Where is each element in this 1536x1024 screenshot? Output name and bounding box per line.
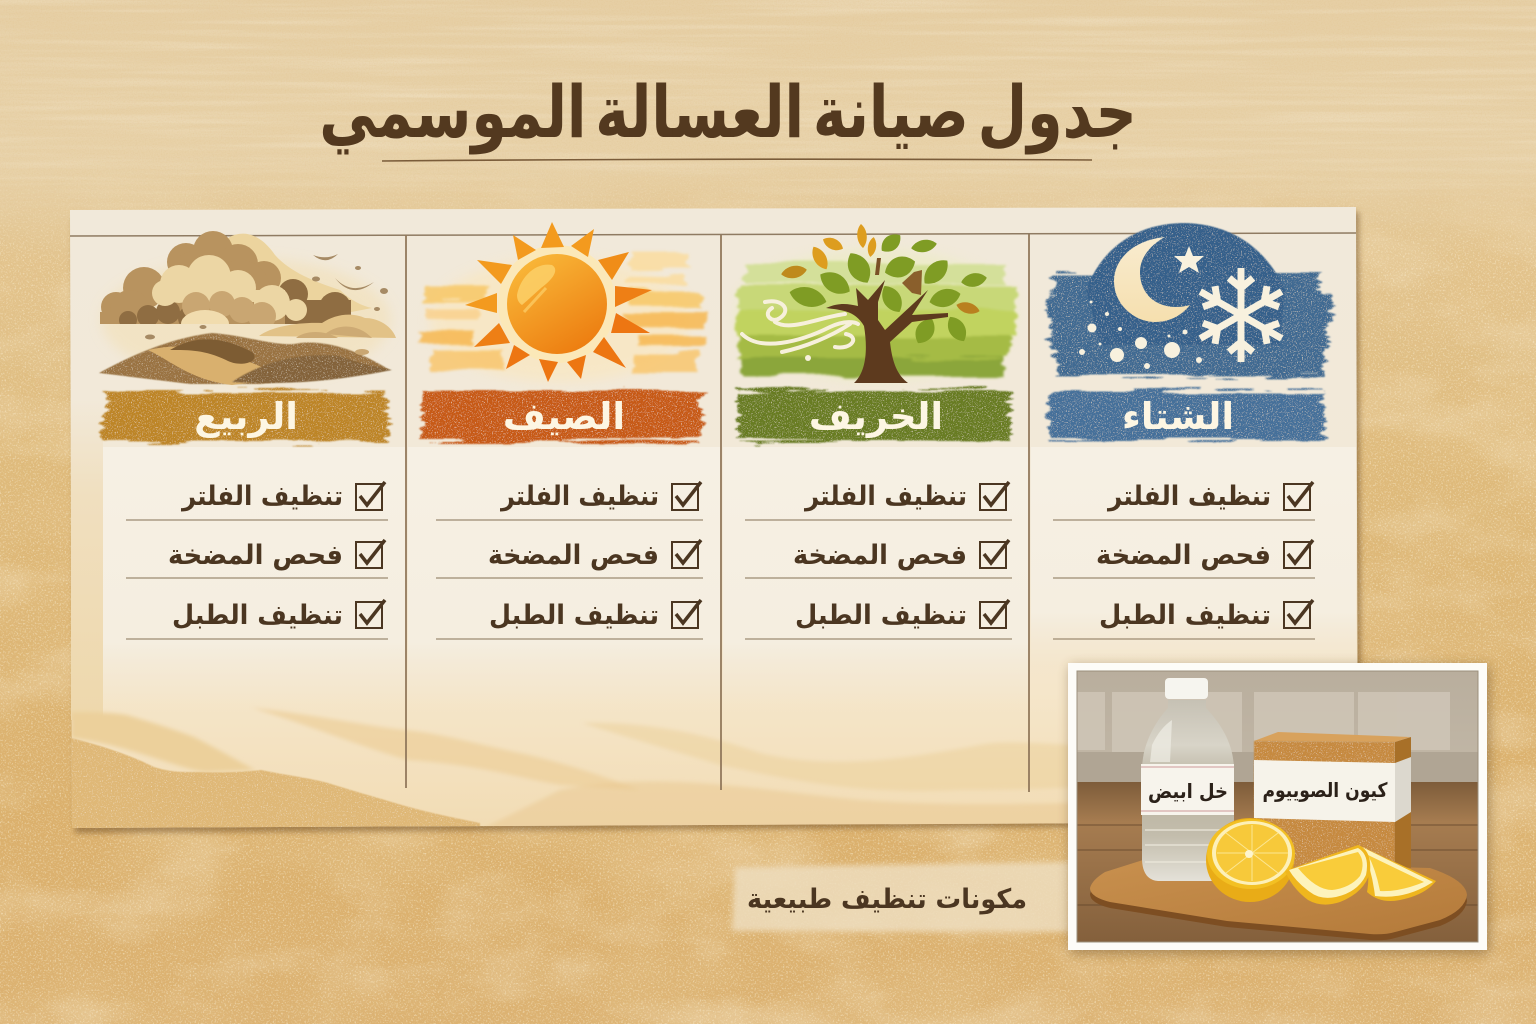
- photo: natural ingredients: [1068, 663, 1489, 953]
- snowflake: [1194, 268, 1288, 362]
- checklist: winter: فحص المضخة: [1096, 540, 1271, 571]
- checklist: spring: تنظيف الطبل: [172, 600, 343, 631]
- checklist: autumn: [745, 481, 1012, 639]
- column block: autumn: [723, 447, 1028, 707]
- checklist: summer: تنظيف الفلتر: [499, 481, 659, 512]
- bottle label: [1141, 764, 1234, 815]
- checklist: spring: تنظيف الفلتر: [180, 481, 343, 512]
- season banner: autumn: الخريف: [809, 395, 943, 438]
- baking soda box: [1254, 732, 1411, 868]
- bottle label: خل ابيض: [1148, 779, 1228, 803]
- column block: summer: [408, 447, 720, 707]
- lemon wedge front: [1285, 845, 1370, 905]
- checklist: winter: تنظيف الفلتر: [1106, 481, 1271, 512]
- box label: [1254, 757, 1411, 822]
- lemon half: [1206, 818, 1295, 902]
- season banner: summer: [422, 391, 701, 441]
- vinegar bottle: [1141, 678, 1234, 881]
- checklist: winter: تنظيف الطبل: [1099, 600, 1271, 631]
- icon: spring sandstorm: [99, 231, 396, 385]
- checklist: summer: [436, 481, 703, 639]
- checklist: spring: فحص المضخة: [168, 540, 343, 571]
- star: [1174, 246, 1204, 273]
- caption: natural cleaning ingredients: [732, 862, 1070, 932]
- season banner: winter: [1048, 391, 1324, 441]
- season banner: summer: الصيف: [503, 395, 625, 438]
- caption: natural cleaning ingredients: مكونات تنظيف طبيعية: [747, 884, 1027, 915]
- icon: summer sun: [419, 222, 705, 382]
- season banner: winter: الشتاء: [1122, 395, 1234, 438]
- lemon wedge back: [1358, 845, 1436, 901]
- icon: autumn tree: [736, 224, 1016, 383]
- icon: winter night: [1048, 223, 1332, 376]
- title: جدول صيانة العسالة الموسمي: [319, 72, 1137, 155]
- checklist: winter: [1053, 481, 1315, 639]
- checklist: autumn: تنظيف الطبل: [795, 600, 967, 631]
- checklist: autumn: تنظيف الفلتر: [803, 481, 967, 512]
- column block: winter: [1031, 447, 1356, 667]
- column block: spring: [103, 447, 405, 707]
- lemons: [1206, 818, 1436, 905]
- checklist: summer: تنظيف الطبل: [489, 600, 659, 631]
- moon: [1114, 237, 1190, 322]
- cutting board: [1090, 860, 1467, 940]
- season banner: autumn: [738, 391, 1010, 441]
- checklist: autumn: فحص المضخة: [793, 540, 967, 571]
- box label: كيون الصوييوم: [1262, 778, 1388, 802]
- season banner: spring: [104, 391, 388, 441]
- checklist: spring: [126, 481, 388, 639]
- checklist: summer: فحص المضخة: [488, 540, 659, 571]
- panel: seasonal schedule: [70, 207, 1361, 833]
- season banner: spring: الربيع: [194, 395, 298, 438]
